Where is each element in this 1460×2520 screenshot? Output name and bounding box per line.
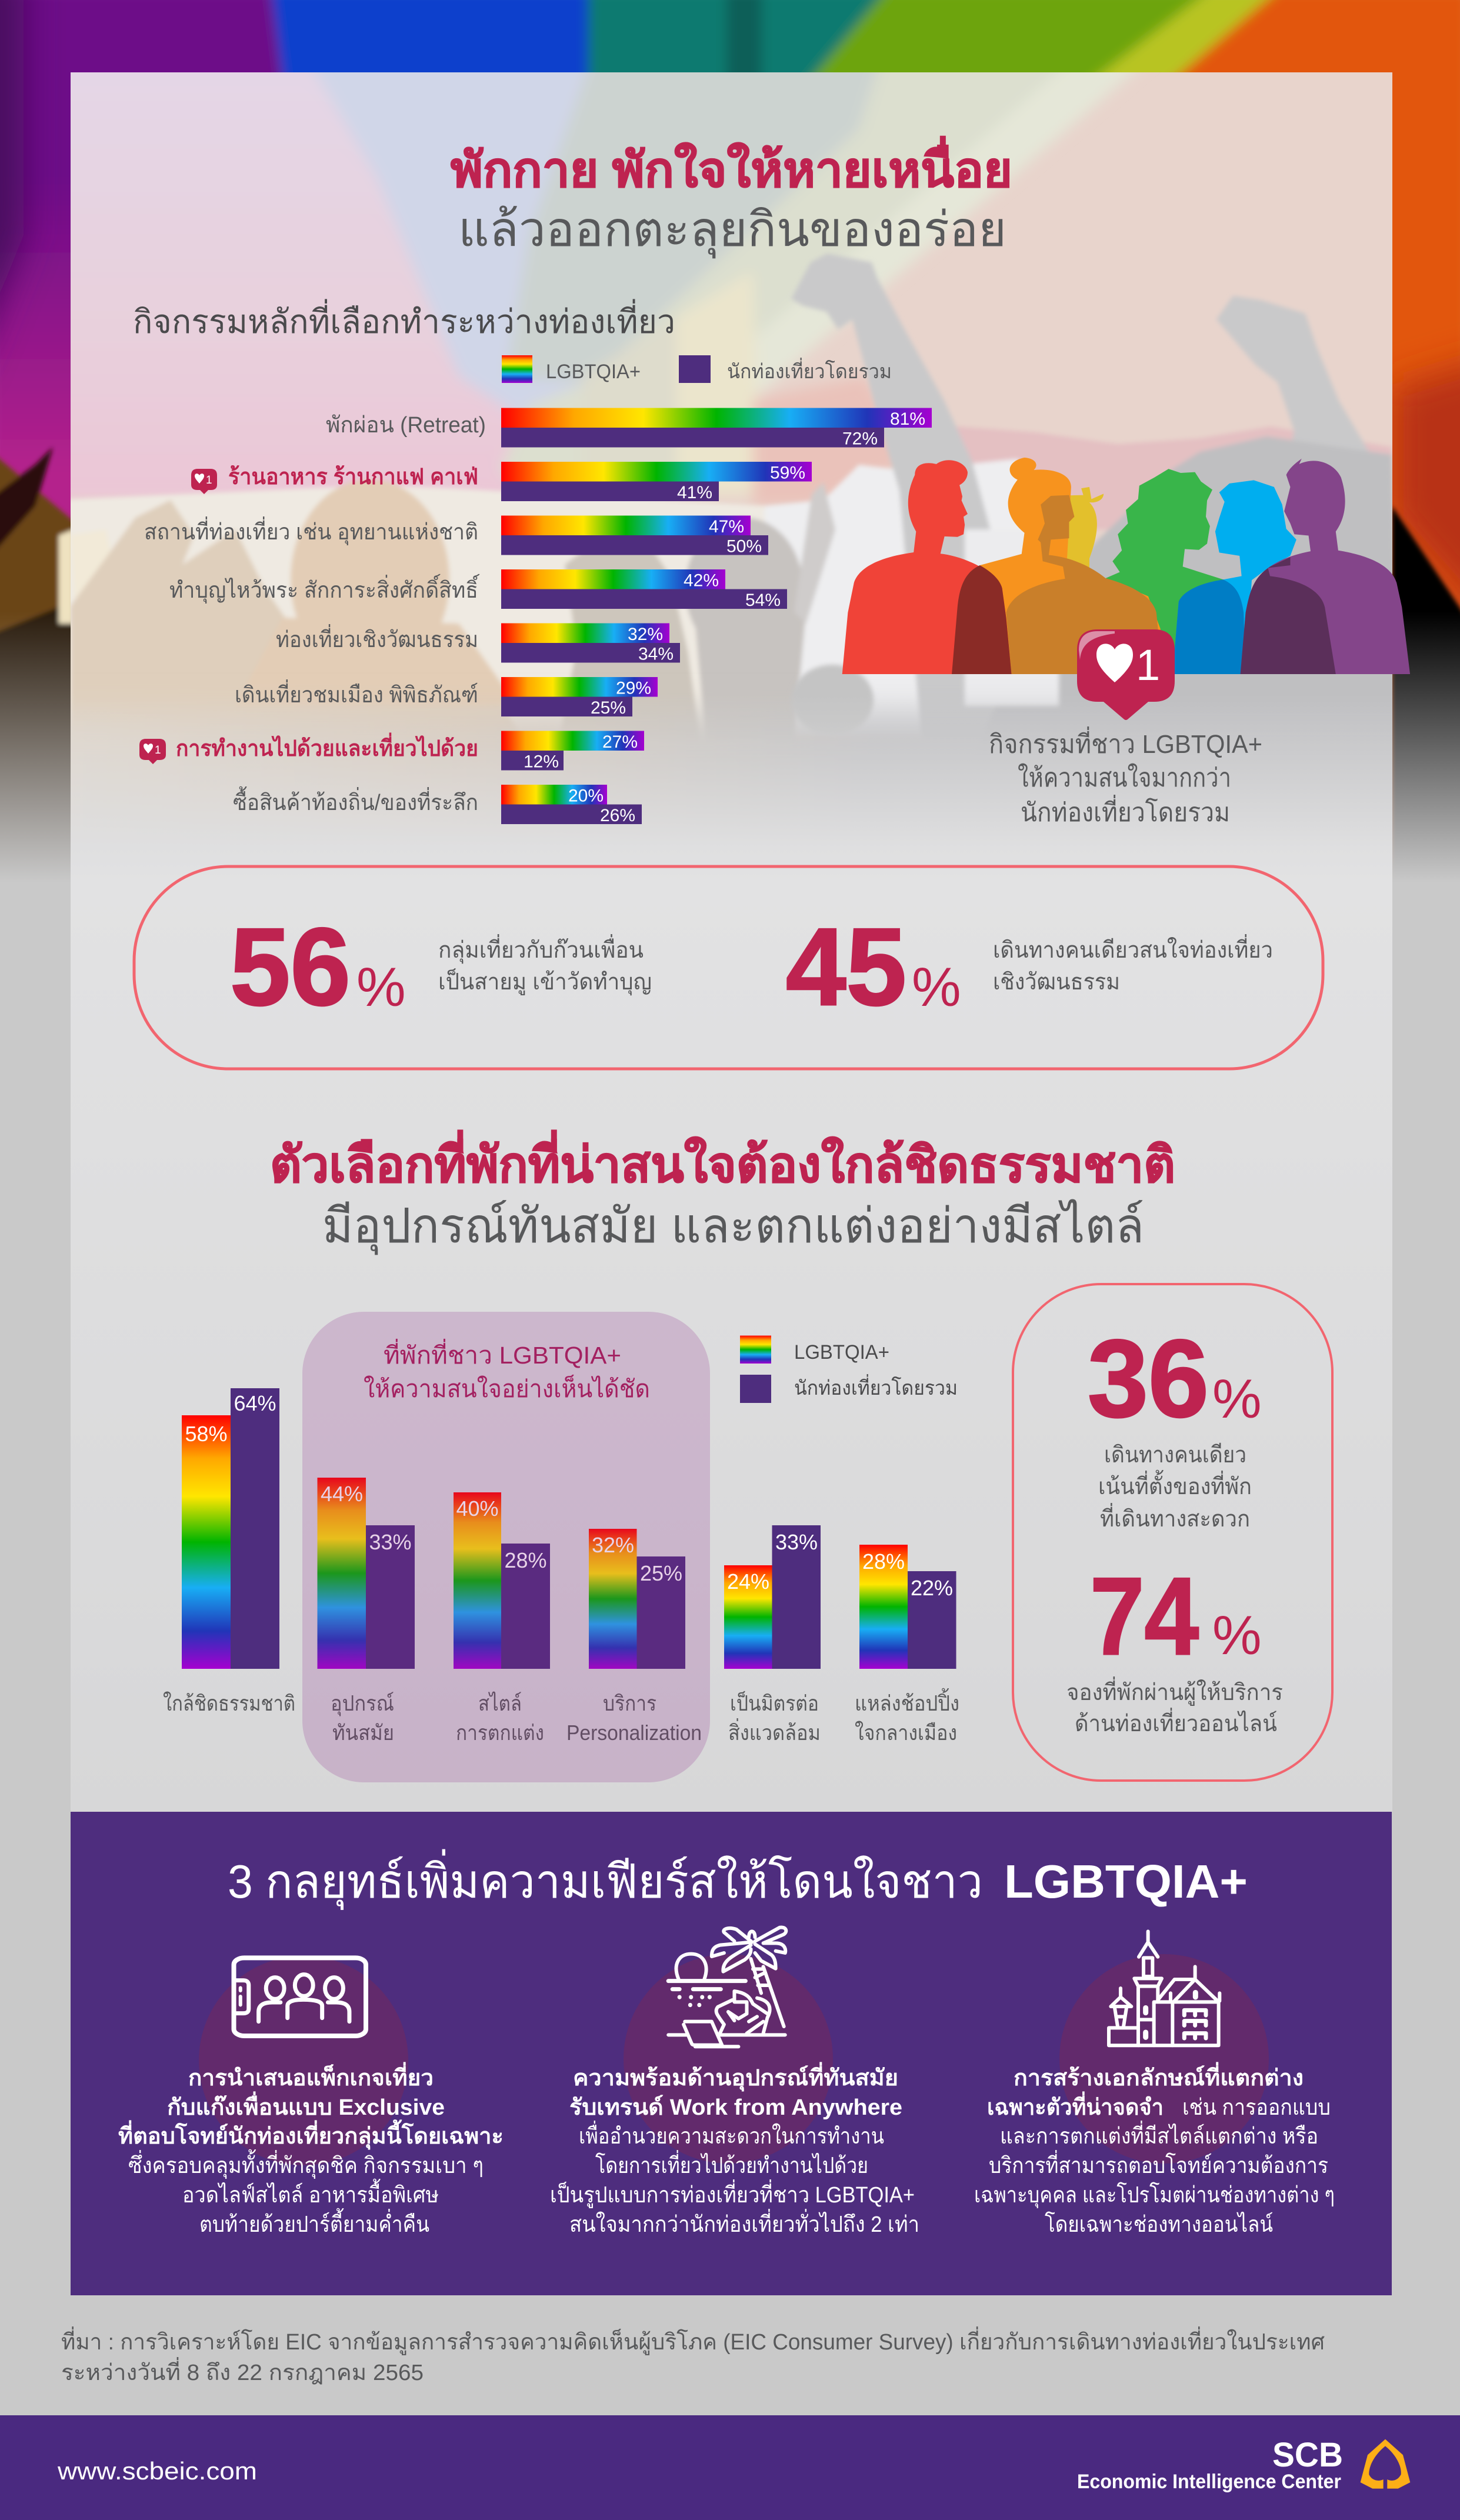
column group: equipment: 33% — [369, 1530, 412, 1554]
row: souvenirs: ซื้อสินค้าท้องถิ่น/ของที่ระลึก — [233, 786, 478, 815]
row: retreat — [326, 408, 932, 448]
footer: SCB wordmark — [1077, 2436, 1343, 2493]
column group: style: 28% — [504, 1548, 547, 1572]
column group: personalization — [566, 1529, 702, 1745]
row: work and travel: 12% — [524, 752, 559, 772]
row: work and travel: การทำงานไปด้วยและเที่ยวไปด้วย — [176, 732, 478, 761]
row: city walk: 29% — [616, 679, 651, 698]
column group: shopping — [855, 1545, 959, 1745]
legend: activities chart: นักท่องเที่ยวโดยรวม — [727, 358, 892, 383]
panel: main sheet with faded photo — [71, 72, 1392, 825]
stat: 56% — [230, 905, 652, 1028]
text: strategy 3: เช่น การออกแบบ — [1182, 2095, 1331, 2120]
row: temples: 54% — [745, 591, 781, 610]
heading: 3 strategies: LGBTQIA+ — [1004, 1855, 1248, 1908]
icon: SCB logo — [1361, 2439, 1410, 2489]
column group: equipment: อุปกรณ์ — [331, 1691, 394, 1716]
bar chart: activities — [139, 408, 932, 825]
panel: mauve highlight — [302, 1312, 710, 1782]
row: restaurants and cafes: 1 — [206, 474, 212, 486]
row: souvenirs: 26% — [600, 806, 635, 825]
stat: 56%: 56 — [230, 905, 351, 1028]
row: temples: ทำบุญไหว้พระ สักการะสิ่งศักดิ์สิทธิ์ — [169, 574, 480, 604]
row: attractions: สถานที่ท่องเที่ยว เช่น อุทยานแห่งชาติ — [144, 516, 478, 545]
column group: equipment: ทันสมัย — [332, 1721, 394, 1745]
row: souvenirs: 20% — [568, 786, 604, 806]
column: work from anywhere — [550, 1927, 919, 2237]
text: strategy 2: โดยการเที่ยวไปด้วยทำงานไปด้วย — [595, 2150, 868, 2178]
row: work and travel — [139, 731, 644, 772]
row: attractions: 50% — [726, 536, 762, 556]
stat: 36%: 36 — [1088, 1317, 1209, 1440]
text: strategy 1: การนำเสนอแพ็กเกจเที่ยว — [188, 2062, 434, 2091]
text: strategy 1: ซึ่งครอบคลุมทั้งที่พักสุดชิค กิจกรรมเบา ๆ — [128, 2149, 484, 2179]
row: restaurants and cafes — [191, 462, 812, 502]
text: strategy 3: การสร้างเอกลักษณ์ที่แตกต่าง — [1014, 2062, 1304, 2091]
column group: style: การตกแต่ง — [456, 1721, 544, 1745]
column group: personalization: 32% — [592, 1533, 634, 1557]
column group: style: 40% — [456, 1496, 499, 1521]
footer bar — [0, 2415, 1460, 2520]
legend: accommodation chart: LGBTQIA+ — [794, 1341, 889, 1364]
text: strategy 2: สนใจมากกว่านักท่องเที่ยวทั่วไปถึง 2 เท่า — [569, 2209, 919, 2237]
legend: accommodation chart — [740, 1335, 958, 1403]
heading: main activities: กิจกรรมหลักที่เลือกทำระหว่างท่องเที่ยว — [133, 299, 675, 340]
row: restaurants and cafes: 59% — [770, 464, 805, 482]
text: strategy 1: ที่ตอบโจทย์นักท่องเที่ยวกลุ่มนี้โดยเฉพาะ — [118, 2119, 504, 2150]
stat: 45%: เดินทางคนเดียวสนใจท่องเที่ยว — [993, 934, 1273, 963]
stat: 74%: % — [1212, 1604, 1262, 1666]
row: cultural tourism: 32% — [628, 625, 663, 644]
column group: nature: ใกล้ชิดธรรมชาติ — [163, 1691, 295, 1715]
column group: eco friendly — [724, 1525, 821, 1745]
row: restaurants and cafes: 41% — [677, 483, 712, 502]
heading: accommodation: ตัวเลือกที่พักที่น่าสนใจต้องใกล้ชิดธรรมชาติ — [270, 1130, 1175, 1192]
column group: nature — [163, 1388, 295, 1715]
stat: 56%: % — [356, 956, 406, 1018]
stat: 56%: เป็นสายมู เข้าวัดทำบุญ — [438, 968, 652, 996]
column group: personalization: 25% — [640, 1561, 682, 1585]
background photo: rainbow flag and crowd — [0, 0, 1460, 965]
stat: 74%: จองที่พักผ่านผู้ให้บริการ — [1066, 1676, 1283, 1706]
text: strategy 3: เฉพาะบุคคล และโปรโมตผ่านช่องทางต่าง ๆ — [974, 2182, 1335, 2208]
caption: activities LGBTQIA+ prefer: ให้ความสนใจมากกว่า — [1018, 763, 1231, 792]
bar chart: accommodation — [163, 1388, 959, 1745]
stat: 74%: ด้านท่องเที่ยวออนไลน์ — [1075, 1708, 1277, 1736]
stat: 36%: เน้นที่ตั้งของที่พัก — [1098, 1469, 1252, 1499]
icon: palm tree and laptop — [624, 1927, 833, 2164]
caption: activities LGBTQIA+ prefer — [989, 726, 1262, 827]
row: city walk — [235, 677, 658, 718]
text: strategy 2: รับเทรนด์ Work from Anywhere — [569, 2095, 902, 2120]
text: strategy 3: โดยเฉพาะช่องทางออนไลน์ — [1045, 2211, 1273, 2237]
row: cultural tourism — [276, 624, 680, 664]
source note: ที่มา : การวิเคราะห์โดย EIC จากข้อมูลการสำรวจความคิดเห็นผู้บริโภค (EIC Consumer Survey) เกี่ยวกับการเดินทางท่องเที่ยวในประเทศ — [61, 2326, 1325, 2355]
stat: 36%: % — [1212, 1368, 1262, 1429]
row: restaurants and cafes: ร้านอาหาร ร้านกาแฟ คาเฟ่ — [228, 465, 478, 489]
panel: 3 strategies — [71, 1812, 1392, 2295]
text: strategy 3: และการตกแต่งที่มีสไตล์แตกต่าง หรือ — [1000, 2121, 1318, 2149]
column group: eco friendly: สิ่งแวดล้อม — [728, 1718, 821, 1745]
title: พักกาย พักใจให้หายเหนื่อย — [451, 136, 1012, 197]
panel: lower sheet fade — [71, 694, 1392, 1812]
illustration: rainbow people silhouettes — [842, 458, 1410, 674]
column group: nature: 58% — [185, 1422, 228, 1446]
column group: equipment — [318, 1478, 415, 1745]
footer: website: www.scbeic.com — [57, 2457, 257, 2485]
stat: 74% — [1066, 1555, 1283, 1736]
icon: castle hotel — [1059, 1931, 1269, 2164]
legend: activities chart: LGBTQIA+ — [546, 361, 641, 383]
row: souvenirs — [233, 785, 642, 825]
stat: 56%: กลุ่มเที่ยวกับก๊วนเพื่อน — [438, 934, 644, 964]
column: exclusive packages — [118, 1956, 504, 2237]
row: work and travel: 27% — [602, 732, 638, 752]
callout: 36% and 74% pill — [1013, 1284, 1332, 1781]
column group: nature: 64% — [234, 1391, 276, 1415]
text: strategy 1: กับแก๊งเพื่อนแบบ Exclusive — [167, 2091, 445, 2120]
heading: accommodation — [270, 1130, 1175, 1255]
icon: like badge — [1077, 629, 1175, 720]
row: cultural tourism: 34% — [638, 645, 674, 664]
heading: 3 strategies: 3 กลยุทธ์เพิ่มความเฟียร์สให้โดนใจชาว — [228, 1849, 983, 1910]
column group: eco friendly: 33% — [775, 1530, 818, 1554]
column group: personalization: Personalization — [566, 1721, 702, 1745]
legend: activities chart — [502, 355, 892, 383]
text: strategy 2: เพื่ออำนวยความสะดวกในการทำงาน — [579, 2121, 884, 2149]
icon: video call people — [199, 1956, 408, 2165]
footer: SCB wordmark: SCB — [1272, 2436, 1343, 2474]
stat: 36% — [1088, 1317, 1262, 1532]
row: city walk: เดินเที่ยวชมเมือง พิพิธภัณฑ์ — [235, 679, 478, 708]
column group: eco friendly: เป็นมิตรต่อ — [730, 1690, 819, 1715]
stat: 45%: % — [912, 956, 961, 1018]
row: attractions — [144, 515, 768, 556]
row: work and travel: 1 — [155, 744, 161, 756]
text: strategy 1 — [118, 2062, 504, 2237]
stat: 45%: เชิงวัฒนธรรม — [993, 969, 1120, 995]
column group: style — [454, 1492, 550, 1745]
stat: 36%: ที่เดินทางสะดวก — [1100, 1503, 1250, 1532]
stat: 45%: 45 — [786, 905, 906, 1028]
footer: SCB wordmark: Economic Intelligence Center — [1077, 2471, 1341, 2493]
caption: activities LGBTQIA+ prefer: นักท่องเที่ยวโดยรวม — [1021, 794, 1230, 827]
text: strategy 3 — [974, 2062, 1335, 2237]
stat: 45% — [786, 905, 1273, 1028]
text: strategy 2: ความพร้อมด้านอุปกรณ์ที่ทันสมัย — [573, 2062, 898, 2092]
panel: mauve highlight: ที่พักที่ชาว LGBTQIA+ — [384, 1339, 621, 1369]
column: unique identity — [974, 1931, 1335, 2237]
text: strategy 2 — [550, 2062, 919, 2237]
text: strategy 2: เป็นรูปแบบการท่องเที่ยวที่ชาว LGBTQIA+ — [550, 2179, 915, 2208]
text: strategy 3: บริการที่สามารถตอบโจทย์ความต้องการ — [989, 2150, 1328, 2178]
row: cultural tourism: ท่องเที่ยวเชิงวัฒนธรรม — [276, 624, 478, 652]
row: attractions: 47% — [709, 517, 744, 536]
row: city walk: 25% — [591, 698, 626, 718]
column group: shopping: 28% — [862, 1549, 905, 1574]
column group: eco friendly: 24% — [727, 1569, 769, 1594]
source note — [61, 2326, 1325, 2385]
legend: accommodation chart: นักท่องเที่ยวโดยรวม — [794, 1374, 958, 1399]
heading: accommodation: มีอุปกรณ์ทันสมัย และตกแต่งอย่างมีสไตล์ — [322, 1199, 1144, 1255]
title: แล้วออกตะลุยกินของอร่อย — [458, 203, 1006, 259]
heading: 3 strategies — [228, 1849, 1248, 1910]
panel: mauve highlight: ให้ความสนใจอย่างเห็นได้ชัด — [364, 1375, 650, 1402]
stat: 36%: เดินทางคนเดียว — [1104, 1442, 1246, 1468]
text: strategy 1: ตบท้ายด้วยปาร์ตี้ยามค่ำคืน — [199, 2208, 429, 2237]
column group: shopping: 22% — [911, 1576, 953, 1600]
column group: style: สไตล์ — [478, 1691, 522, 1715]
column group: shopping: แหล่งช้อปปิ้ง — [855, 1688, 959, 1715]
row: retreat: 72% — [842, 429, 878, 448]
caption: activities LGBTQIA+ prefer: กิจกรรมที่ชาว LGBTQIA+ — [989, 726, 1262, 759]
row: retreat: 81% — [890, 409, 925, 429]
callout: 56% and 45% pill — [134, 866, 1323, 1069]
text: strategy 1: อวดไลฟ์สไตล์ อาหารมื้อพิเศษ — [182, 2178, 439, 2208]
title — [451, 136, 1012, 259]
column group: equipment: 44% — [321, 1482, 363, 1506]
icon: like badge: 1 — [1136, 641, 1160, 689]
text: strategy 3: เฉพาะตัวที่น่าจดจำ — [987, 2091, 1164, 2120]
column group: shopping: ใจกลางเมือง — [855, 1721, 957, 1745]
row: retreat: พักผ่อน (Retreat) — [326, 413, 486, 438]
row: temples — [169, 569, 787, 610]
row: temples: 42% — [684, 571, 719, 591]
stat: 74%: 74 — [1090, 1555, 1199, 1678]
column group: personalization: บริการ — [603, 1691, 656, 1715]
background fade to grey — [0, 588, 1460, 1012]
source note: ระหว่างวันที่ 8 ถึง 22 กรกฎาคม 2565 — [61, 2357, 424, 2385]
